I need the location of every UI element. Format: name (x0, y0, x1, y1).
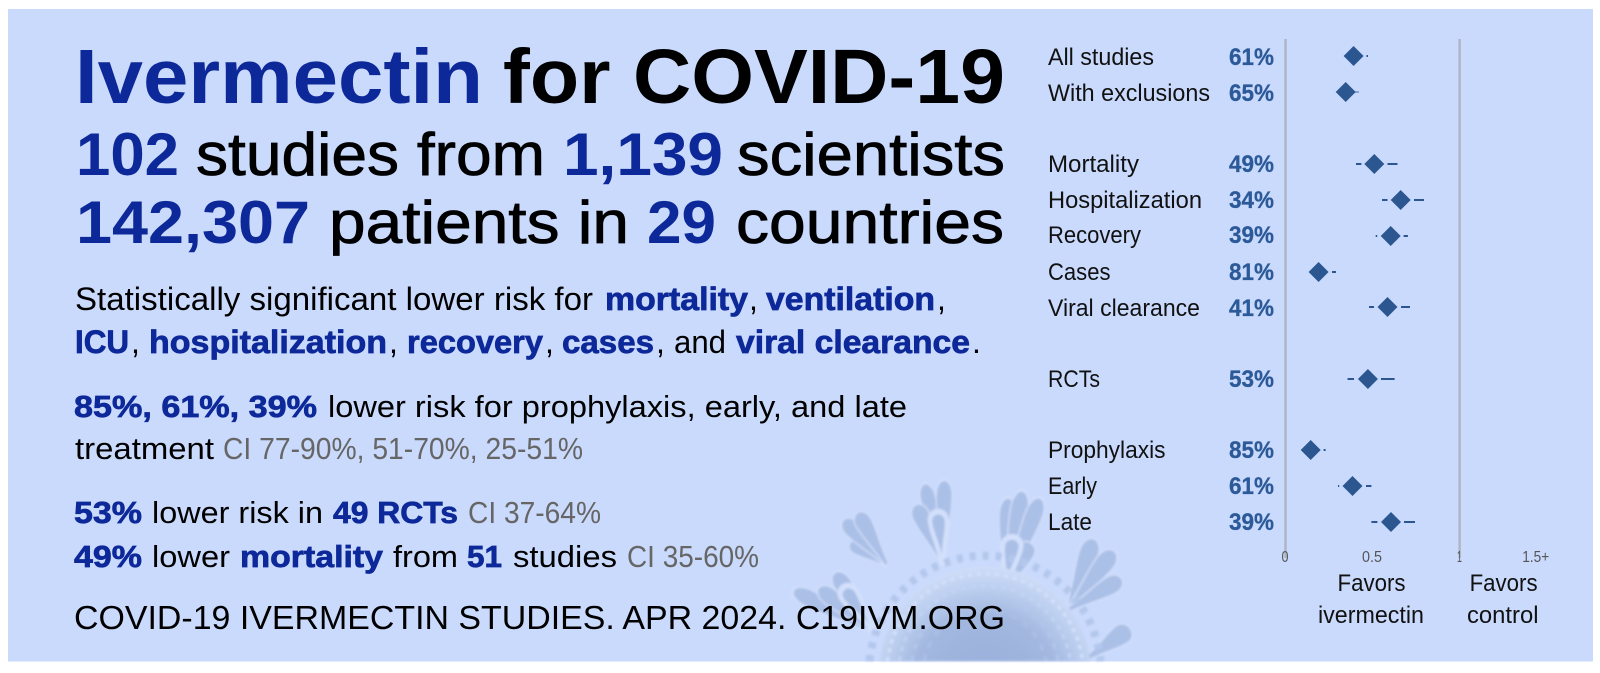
headline: patients and countries: 29 (647, 189, 716, 256)
headline: studies and scientists: scientists (737, 121, 1005, 188)
text block: prophylaxis, early, late (74, 389, 907, 466)
text block: RCTs: CI 37-64% (468, 495, 601, 530)
text block: mortality: CI 35-60% (627, 539, 759, 574)
text block: statistically significant outcomes: ICU (75, 324, 129, 360)
text block: statistically significant outcomes: and (674, 324, 726, 360)
title: Ivermectin (75, 34, 483, 120)
headline: studies and scientists: 102 (76, 121, 179, 188)
text block: statistically significant outcomes: recovery (407, 324, 543, 360)
text block: statistically significant outcomes (75, 281, 981, 360)
x axis tick labels: 1 (1457, 549, 1462, 566)
row: cases (1048, 259, 1336, 286)
text block: mortality: 51 (467, 539, 502, 574)
row: recovery (1048, 222, 1408, 249)
row: mortality: 49% (1229, 151, 1274, 178)
text block: mortality: from (393, 539, 458, 574)
row: late: Late (1048, 509, 1092, 536)
row: hospitalization (1048, 187, 1424, 214)
row: RCTs (1048, 366, 1395, 393)
row: late (1048, 509, 1415, 536)
row: recovery: Recovery (1048, 222, 1141, 249)
row: RCTs: RCTs (1048, 366, 1100, 393)
headline: studies and scientists (76, 121, 1005, 188)
row: RCTs: 53% (1229, 366, 1274, 393)
text block: RCTs: 49 RCTs (333, 495, 458, 530)
row: mortality: Mortality (1048, 151, 1139, 178)
headline: patients and countries: countries (736, 189, 1004, 256)
text block: prophylaxis, early, late: treatment (75, 431, 214, 466)
forest plot chart (1048, 39, 1549, 629)
row: viral clearance: 41% (1229, 295, 1274, 322)
row: cases: 81% (1229, 259, 1274, 286)
row: early: Early (1048, 473, 1097, 500)
text block: mortality (74, 539, 759, 574)
x axis tick labels (1282, 549, 1549, 566)
text block: mortality: mortality (240, 539, 384, 574)
row: early (1048, 473, 1371, 500)
row: all studies: All studies (1048, 44, 1154, 71)
text block: mortality: lower (152, 539, 230, 574)
row: with exclusions (1048, 80, 1359, 107)
text block: prophylaxis, early, late: 85%, 61%, 39% (74, 389, 317, 424)
text block: statistically significant outcomes: ventilation (766, 281, 935, 317)
text block: statistically significant outcomes: mortality (605, 281, 748, 317)
title (75, 34, 1005, 120)
axis label: favors ivermectin: Favors (1338, 570, 1406, 597)
text block: prophylaxis, early, late: CI 77-90%, 51-70%, 25-51% (223, 431, 583, 466)
row: cases: Cases (1048, 259, 1110, 286)
x axis tick labels: 1.5+ (1522, 549, 1549, 566)
text block: statistically significant outcomes: , (749, 281, 758, 317)
text block: statistically significant outcomes: , (389, 324, 398, 360)
row: late: 39% (1229, 509, 1274, 536)
text block: statistically significant outcomes: hospitalization (149, 324, 387, 360)
row: viral clearance (1048, 295, 1410, 322)
row: prophylaxis (1048, 437, 1326, 464)
text block: statistically significant outcomes: , (656, 324, 665, 360)
text block: RCTs: 53% (74, 495, 142, 530)
x axis tick labels: 0 (1282, 549, 1289, 566)
row: mortality (1048, 151, 1398, 178)
row: hospitalization: 34% (1229, 187, 1274, 214)
axis label: favors control: Favors (1470, 570, 1538, 597)
row: early: 61% (1229, 473, 1274, 500)
headline: patients and countries (76, 189, 1004, 256)
text block: statistically significant outcomes: viral clearance (736, 324, 970, 360)
text block: statistically significant outcomes: cases (562, 324, 654, 360)
row: prophylaxis: 85% (1229, 437, 1274, 464)
axis label: favors ivermectin (1318, 570, 1424, 629)
text block: mortality: 49% (74, 539, 142, 574)
axis label: favors ivermectin: ivermectin (1318, 602, 1424, 629)
footer source line: COVID-19 IVERMECTIN STUDIES. APR 2024. C19IVM.ORG (74, 599, 1005, 636)
row: all studies (1048, 44, 1368, 71)
row: recovery: 39% (1229, 222, 1274, 249)
text block: statistically significant outcomes: , (131, 324, 140, 360)
text block: mortality: studies (513, 539, 617, 574)
headline: studies and scientists: 1,139 (563, 121, 723, 188)
row: prophylaxis: Prophylaxis (1048, 437, 1166, 464)
text block: statistically significant outcomes: . (972, 324, 981, 360)
text block: RCTs: lower risk in (152, 495, 323, 530)
text block: statistically significant outcomes: Statistically significant lower risk for (75, 281, 593, 317)
text block: statistically significant outcomes: , (545, 324, 554, 360)
axis label: favors control: control (1467, 602, 1538, 629)
row: with exclusions: 65% (1229, 80, 1274, 107)
title: for COVID-19 (503, 34, 1005, 120)
row: with exclusions: With exclusions (1048, 80, 1210, 107)
row: hospitalization: Hospitalization (1048, 187, 1202, 214)
virus illustration (789, 480, 1136, 667)
headline: patients and countries: 142,307 (76, 189, 310, 256)
axis label: favors control (1467, 570, 1538, 629)
row: viral clearance: Viral clearance (1048, 295, 1200, 322)
text block: RCTs (74, 495, 601, 530)
headline: patients and countries: patients in (329, 189, 629, 256)
headline: studies and scientists: studies from (196, 121, 545, 188)
text block: prophylaxis, early, late: lower risk for prophylaxis, early, and late (328, 389, 907, 424)
x axis tick labels: 0.5 (1362, 549, 1382, 566)
text block: statistically significant outcomes: , (937, 281, 946, 317)
row: all studies: 61% (1229, 44, 1274, 71)
